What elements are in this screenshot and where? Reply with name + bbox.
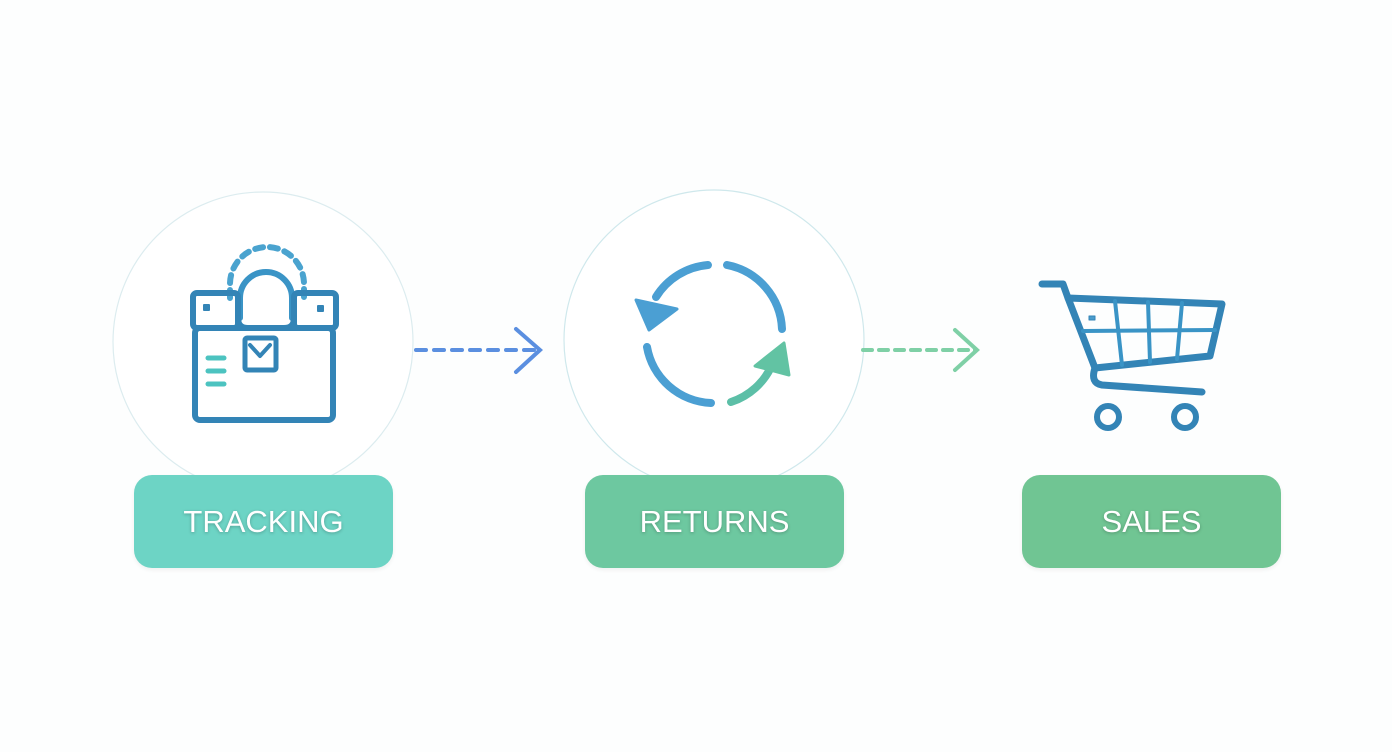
arrow 1	[416, 329, 540, 372]
label: returns	[585, 475, 844, 568]
icon: shopping cart	[1042, 284, 1222, 428]
label: tracking	[134, 475, 393, 568]
icon: cycle	[636, 265, 789, 403]
arrow 2	[863, 330, 977, 370]
circle: tracking	[113, 192, 413, 492]
label: tracking: TRACKING	[183, 504, 344, 538]
label: returns: RETURNS	[640, 504, 789, 538]
label: sales	[1022, 475, 1281, 568]
icon: shopping bag	[193, 247, 336, 420]
label: sales: SALES	[1102, 504, 1201, 538]
circle: returns	[564, 190, 864, 490]
